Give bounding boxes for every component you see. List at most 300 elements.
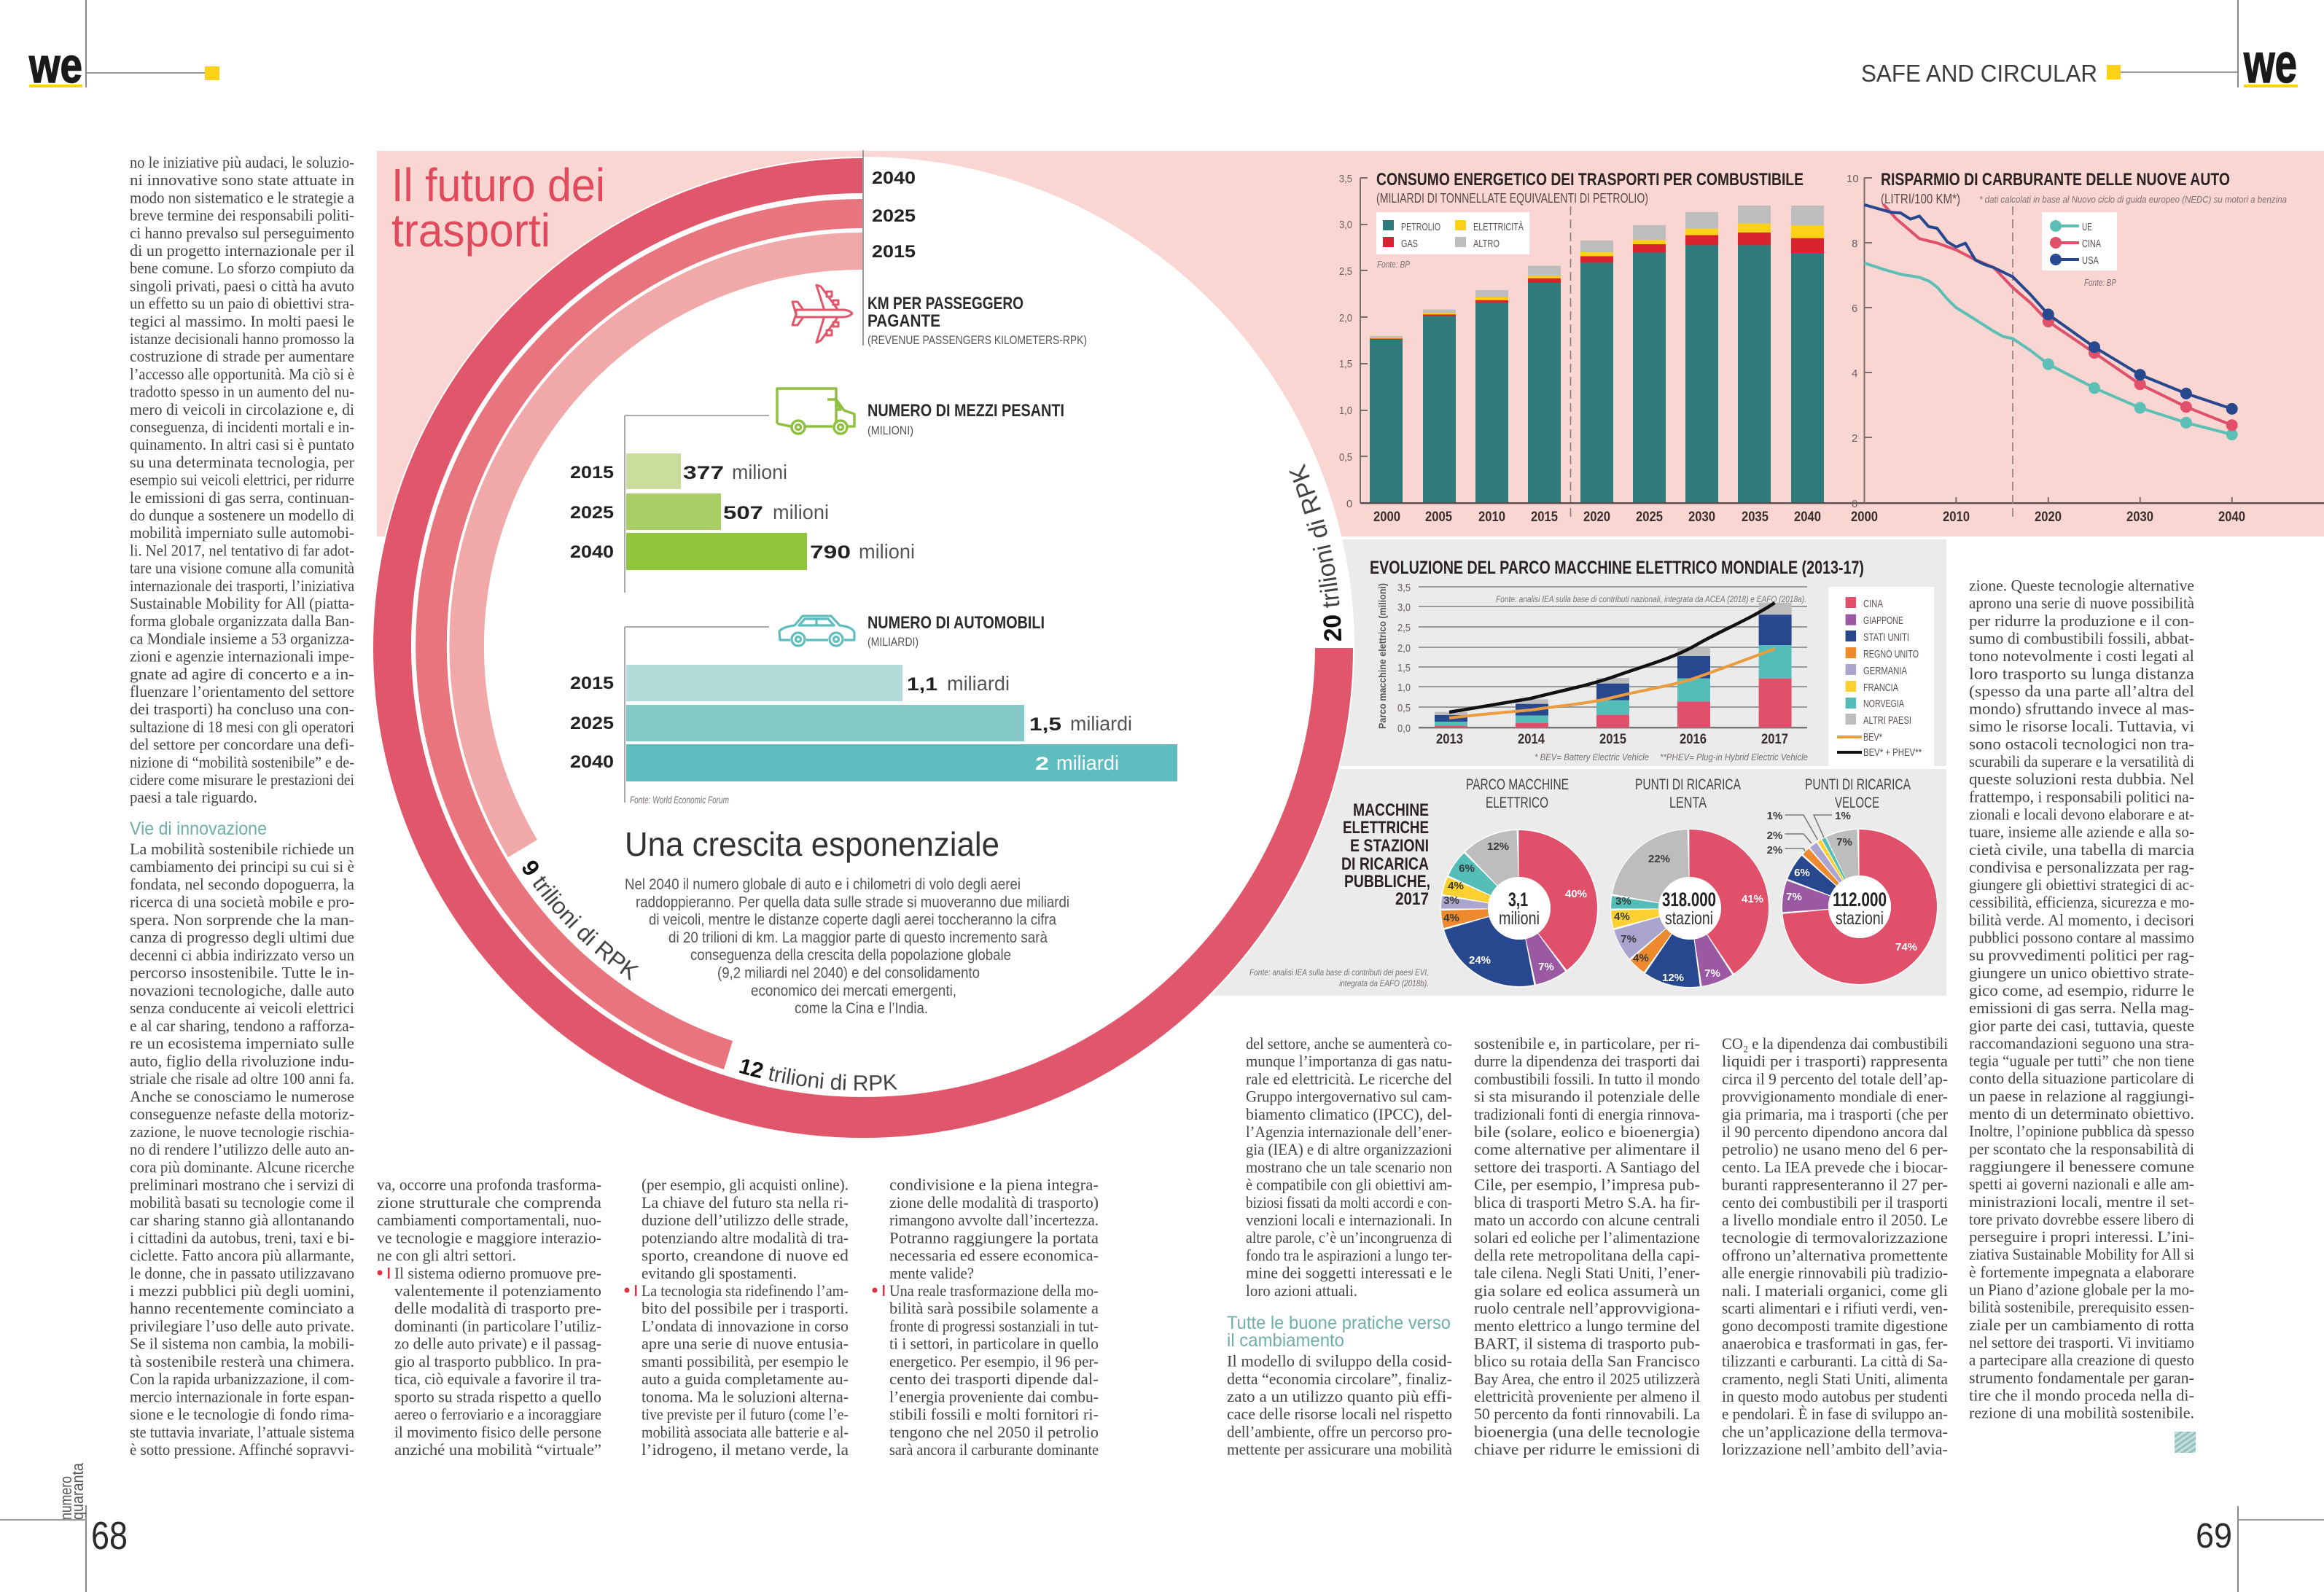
text column 8 — [1969, 576, 2194, 1422]
text column 1: lower: car sharing stanno già allontanando — [130, 1211, 354, 1229]
text column 3: bito del possibile per i trasporti. — [642, 1299, 849, 1317]
x axis years: 2035 — [1742, 510, 1769, 525]
text column 2: zione strutturale che comprenda — [377, 1193, 601, 1211]
text column 3: auto a guida completamente au- — [642, 1370, 849, 1388]
text column 6: ruolo centrale nell’approvvigiona- — [1474, 1299, 1700, 1317]
section title: PUBBLICHE, — [1344, 872, 1430, 891]
text column 2: dominanti (in particolare l’utiliz- — [394, 1316, 601, 1335]
text column 1: lower: cora più dominante. Alcune ricerche — [130, 1158, 354, 1176]
text column 2: valentemente il potenziamento — [394, 1281, 601, 1300]
text column 7: anaerobica e trasformati in gas, fer- — [1722, 1334, 1948, 1352]
donut 1: parco macchine elettrico: 7% — [1538, 961, 1554, 973]
text column 8: tore privato dovrebbe essere libero di — [1969, 1210, 2194, 1228]
text column 1: upper: li. Nel 2017, nel tentativo di far adot- — [130, 541, 354, 559]
heading: vie di innovazione: Vie di innovazione — [130, 819, 267, 839]
block: km per passenger — [792, 285, 1087, 347]
donut 2: punti di ricarica lenta — [1610, 776, 1769, 988]
text column 8: a partecipare alla creazione di questo — [1969, 1351, 2194, 1369]
text column 2: Il sistema odierno promuove pre- — [394, 1264, 601, 1282]
text column 8: ministrazioni locali, mentre il set- — [1969, 1193, 2194, 1211]
text column 8: strumento fondamentale per garan- — [1969, 1368, 2194, 1386]
y axis labels: 1,5 — [1339, 358, 1352, 370]
section title: 2017 — [1395, 889, 1429, 909]
small percentage callouts: 2% — [1767, 844, 1782, 857]
bar 2040 trucks — [570, 533, 915, 570]
donut 3: punti di ricarica veloce: PUNTI DI RICARICA — [1805, 776, 1911, 793]
text column 1: lower: ricerca di una società mobile e pro- — [130, 893, 354, 911]
page number 69: 69 — [2196, 1517, 2232, 1556]
text column 1: lower: cambiamento dei principi su cui si è — [130, 857, 354, 875]
text column 5: upper: del settore, anche se aumenterà co- — [1246, 1034, 1452, 1053]
text column 1: lower: Anche se conosciamo le numerose — [130, 1087, 354, 1105]
text column 1: lower: sione e le tecnologie di fondo rima- — [130, 1405, 354, 1424]
y axis labels: 1,5 — [1397, 662, 1411, 674]
text column 8: sono ostacoli tecnologici non tra- — [1969, 735, 2194, 753]
donut 1: parco macchine elettrico: ELETTRICO — [1486, 795, 1548, 811]
legend countries: REGNO UNITO — [1863, 648, 1919, 660]
y axis labels: 3,0 — [1397, 601, 1411, 614]
bars — [1435, 603, 1792, 727]
line chart: risparmio di carburante: (LITRI/100 KM*) — [1881, 192, 1960, 206]
text column 1: lower: i mezzi pubblici più degli uomini, — [130, 1281, 354, 1300]
paragraph: crescita: conseguenza della crescita della popolazione globale — [690, 947, 1011, 964]
x axis years: 2040 — [1794, 510, 1821, 525]
donut section: macchine elettriche e stazioni di ricarica — [1249, 776, 1938, 988]
text column 5: lower: detta “economia circolare”, finaliz- — [1227, 1370, 1452, 1388]
section title: ELETTRICHE — [1343, 818, 1429, 838]
text column 8: raccomandazioni seguono una stra- — [1969, 1034, 2194, 1052]
donut 3: punti di ricarica veloce: 7% — [1836, 836, 1852, 848]
x axis years: 2020 — [1583, 510, 1610, 525]
x axis years: 2015 — [1599, 732, 1626, 747]
text column 6: come alternative per alimentare il — [1474, 1140, 1700, 1158]
text column 2 — [377, 1176, 601, 1459]
text column 4: Una reale trasformazione della mo- — [889, 1281, 1099, 1300]
small percentage callouts: 2% — [1767, 830, 1782, 842]
y axis labels: 3,5 — [1397, 582, 1411, 594]
text column 8: condivisa e personalizzata per rag- — [1969, 858, 2194, 876]
title — [391, 159, 605, 257]
pink background panel — [377, 151, 2324, 536]
text column 4: necessaria ed essere economica- — [889, 1246, 1099, 1264]
text column 1: upper: cidere come misurare le prestazioni dei — [130, 770, 354, 789]
x axis years: 2030 — [2126, 510, 2153, 525]
text column 7: cramento, negli Stati Uniti, alimenta — [1722, 1370, 1948, 1388]
text column 7: offrono un’alternativa promettente — [1722, 1246, 1948, 1264]
text column 4: rimangono avvolte dall’incertezza. — [889, 1211, 1099, 1229]
text column 6: sostenibile e, in particolare, per ri- — [1474, 1034, 1700, 1053]
text column 5: lower — [1227, 1352, 1452, 1459]
bar 2040 cars — [570, 744, 1177, 781]
bar 2025 cars — [570, 705, 1132, 741]
text column 7: circa il 9 percento del totale dell’ap- — [1722, 1069, 1948, 1088]
text column 8: tono notevolmente i costi legati al — [1969, 647, 2194, 665]
block: heavy vehicles: (MILIONI) — [867, 424, 913, 437]
bar 2015 cars: 1,1 — [907, 674, 937, 695]
text column 8: tuare, insieme alle aziende e alla so- — [1969, 823, 2194, 841]
text column 1: upper: nizione di “mobilità sostenibile” e de- — [130, 753, 354, 771]
y axis labels: 4 — [1852, 367, 1857, 380]
text column 2: tica, ciò equivale a favorire il tra- — [394, 1370, 601, 1388]
text column 1: lower: mercio internazionale in forte espan- — [130, 1387, 354, 1405]
legend fuel: GAS — [1401, 238, 1418, 250]
text column 6: BART, il sistema di trasporto pub- — [1474, 1334, 1700, 1352]
heading: una crescita esponenziale: Una crescita esponenziale — [625, 825, 999, 863]
block: cars — [570, 613, 1177, 805]
text column 1: upper: modo non sistematico e le strategie a — [130, 188, 354, 206]
legend countries: BEV* + PHEV** — [1863, 746, 1922, 759]
text column 3: apre una serie di nuove entusia- — [642, 1335, 849, 1353]
y axis labels: 3,0 — [1339, 219, 1352, 231]
text column 8: giungere gli obiettivi strategici di ac- — [1969, 875, 2194, 894]
text column 6: chiave per ridurre le emissioni di — [1474, 1440, 1700, 1459]
icon: truck — [777, 389, 854, 434]
text column 1: lower: auto, figlio della rivoluzione indu- — [130, 1052, 354, 1070]
issue label: quaranta — [69, 1462, 87, 1520]
label: 20 trillion: 20 trilioni di RPK — [1289, 464, 1341, 641]
text column 8: conto della situazione particolare di — [1969, 1069, 2194, 1088]
donut 1: parco macchine elettrico: milioni — [1499, 908, 1540, 929]
donut 2: punti di ricarica lenta: 318.000 — [1662, 889, 1716, 910]
x axis years: 2040 — [2218, 510, 2245, 525]
bar 2015 trucks — [570, 453, 787, 489]
text column 8: perseguire i propri interessi. L’ini- — [1969, 1228, 2194, 1246]
text column 1: lower: privilegiare l’uso delle auto private. — [130, 1316, 354, 1335]
bar 2040 cars: 2040 — [570, 752, 614, 772]
x axis years — [1851, 510, 2245, 525]
text column 1: lower: zazione, le nuove tecnologie rischia- — [130, 1123, 354, 1141]
text column 1: upper: costruzione di strade per aumentare — [130, 347, 354, 365]
end mark: hatched square — [2175, 1432, 2196, 1453]
legend lines: UE — [2082, 221, 2092, 233]
text column 3: mobilità associata alle batterie e al- — [642, 1423, 849, 1441]
text column 1: upper: l’accesso alle opportunità. Ma ciò si è — [130, 364, 354, 383]
donut 1: parco macchine elettrico: 3,1 — [1508, 889, 1528, 910]
y axis labels: 1,0 — [1339, 405, 1352, 417]
text column 6: settore dei trasporti. A Santiago del — [1474, 1158, 1700, 1176]
text column 5: lower: Il modello di sviluppo della cosid- — [1227, 1352, 1452, 1370]
text column 7: scarti alimentari e i rifiuti verdi, ven- — [1722, 1299, 1948, 1317]
text column 7: gia primaria, ma i trasporti (che per — [1722, 1105, 1949, 1123]
donut 1: parco macchine elettrico: 24% — [1469, 954, 1491, 967]
text column 5: upper: biziosi fissati da molti accordi e con- — [1246, 1193, 1452, 1211]
y axis labels: 0 — [1852, 498, 1857, 510]
text column 5: upper: biamento climatico (IPCC), del- — [1246, 1105, 1452, 1123]
bar 2040 trucks: 2040 — [570, 542, 614, 562]
text column 6: tradizionali fonti di energia rinnova- — [1474, 1105, 1700, 1123]
text column 7: il 90 percento dipendono ancora dal — [1722, 1123, 1948, 1141]
icon: car — [779, 616, 854, 646]
paragraph: crescita: economico dei mercati emergenti, — [751, 983, 956, 999]
text column 7: provvigionamento mondiale di ener- — [1722, 1088, 1948, 1106]
block: km per passenger: PAGANTE — [867, 311, 940, 331]
source bp: Fonte: BP — [2084, 277, 2116, 288]
text column 8: cietà civile, una tabella di marcia — [1969, 840, 2194, 859]
text column 8: tire che il mondo proceda nella di- — [1969, 1386, 2194, 1404]
text column 1: lower: Se il sistema non cambia, la mobili- — [130, 1335, 354, 1353]
text column 5: lower: mettente per assicurare una mobilità — [1227, 1440, 1452, 1459]
text column 1: upper: ni innovative sono state attuate in — [130, 171, 354, 189]
ring 2040 — [373, 158, 1353, 1138]
text column 6: Bay Area, che entro il 2025 utilizzerà — [1474, 1370, 1700, 1388]
bar 2015 cars — [570, 665, 1010, 701]
text column 8: sumo di combustibili fossili, abbat- — [1969, 629, 2194, 647]
y axis labels: 2,5 — [1339, 265, 1352, 278]
x axis years: 2010 — [1478, 510, 1505, 525]
source: Fonte: World Economic Forum — [630, 794, 729, 805]
y axis labels: 2,5 — [1397, 622, 1411, 634]
y axis labels: 0,5 — [1397, 702, 1411, 714]
y axis labels: 10 — [1847, 173, 1859, 185]
text column 6: blico su rotaia della San Francisco — [1474, 1352, 1700, 1370]
ring year labels: 2040 — [872, 168, 916, 188]
x axis years — [1436, 732, 1788, 747]
x axis years: 2030 — [1688, 510, 1715, 525]
page header right — [1861, 0, 2298, 95]
text column 8: gior parte dei casi, tuttavia, queste — [1969, 1016, 2194, 1034]
bar 2025 cars: 2025 — [570, 714, 614, 733]
text column 6: Cile, per esempio, l’impresa pub- — [1474, 1176, 1700, 1194]
text column 1: upper: mero di veicoli in circolazione e, di — [130, 400, 354, 418]
source: Fonte: analisi IEA sulla base di contributi nazionali, integrata da ACEA (2018) e EAFO (2018a). — [1496, 594, 1806, 604]
logo: we left: we — [28, 38, 82, 93]
heading: tutte le buone pratiche: il cambiamento — [1227, 1330, 1344, 1351]
x axis years: 2025 — [1636, 510, 1663, 525]
text column 1: lower: le donne, che in passato utilizzavano — [130, 1264, 354, 1282]
text column 2: delle modalità di trasporto pre- — [394, 1299, 601, 1317]
text column 3: potenziando altre modalità di tra- — [642, 1228, 849, 1246]
x axis years: 2017 — [1761, 732, 1788, 747]
x axis years: 2000 — [1373, 510, 1400, 525]
text column 1: upper: quinamento. In altri casi si è puntato — [130, 435, 354, 453]
bar 2025 trucks: milioni — [773, 501, 829, 523]
text column 4: cento dei trasporti dipende dal- — [889, 1370, 1099, 1388]
small percentage callouts — [1767, 810, 1851, 857]
page header left — [28, 0, 219, 93]
ring year labels: 2025 — [872, 206, 916, 226]
issue label — [57, 1462, 87, 1520]
text column 1: lower: percorso insostenibile. Tutte le in- — [130, 964, 354, 982]
text column 6: solari ed eoliche per l’alimentazione — [1474, 1228, 1700, 1246]
donut 1: parco macchine elettrico: 40% — [1565, 888, 1587, 900]
text column 7: che un’applicazione della termova- — [1722, 1422, 1948, 1440]
text column 7: lorizzazione nell’ambito dell’avia- — [1722, 1440, 1948, 1459]
text column 7: tilizzanti e carburanti. La città di Sa- — [1722, 1352, 1948, 1370]
y axis title: Parco macchine elettrico (milioni) — [1376, 583, 1388, 729]
text column 6: combustibili fossili. In tutto il mondo — [1474, 1069, 1700, 1088]
text column 1: upper: tegici al massimo. In molti paesi le — [130, 312, 354, 330]
donut 2: punti di ricarica lenta: 22% — [1648, 853, 1670, 865]
y axis labels — [1397, 582, 1411, 735]
bar 2040 cars: 2 — [1035, 754, 1049, 774]
text column 1: upper: tradotto spesso in un aumento del nu- — [130, 383, 354, 401]
text column 6: tale cilena. Negli Stati Uniti, l’ener- — [1474, 1264, 1700, 1282]
text column 8: scurabili da superare e la versatilità di — [1969, 752, 2194, 770]
baseline of top charts — [1360, 502, 2324, 504]
donut 2: punti di ricarica lenta: 4% — [1633, 952, 1649, 964]
line BEV — [1449, 649, 1774, 718]
text column 4: energetico. Per esempio, il 96 per- — [889, 1352, 1099, 1370]
donut 2: punti di ricarica lenta: PUNTI DI RICARICA — [1635, 776, 1741, 793]
text column 6: bile (solare, eolico e bioenergia) — [1474, 1123, 1700, 1141]
text column 5: lower: zato a un utilizzo quanto più effi- — [1227, 1387, 1452, 1405]
text column 1: upper: internazionale dei trasporti, l’iniziativa — [130, 577, 354, 595]
text column 1: upper: ci hanno prevalso sul perseguimento — [130, 224, 354, 242]
text column 1: lower: ste tuttavia invariate, l’attuale sistema — [130, 1423, 354, 1441]
text column 2: gio al trasporto pubblico. In pra- — [394, 1352, 601, 1370]
text column 1: upper: zioni e agenzie internazionali impe- — [130, 647, 354, 666]
text column 1: lower: e al car sharing, tendono a rafforza- — [130, 1016, 354, 1034]
text column 3: smanti possibilità, per esempio le — [642, 1352, 849, 1370]
text column 1: upper: do dunque a sostenere un modello di — [130, 506, 354, 524]
text column 3: tive previste per il futuro (come l’e- — [642, 1405, 849, 1424]
text column 1: upper — [130, 153, 355, 806]
text column 4: condivisione e la piena integra- — [889, 1176, 1099, 1194]
text column 8: (spesso da una parte all’altra del — [1969, 682, 2194, 700]
donut 2: punti di ricarica lenta: 4% — [1614, 910, 1630, 923]
bar 2025 trucks — [570, 493, 829, 530]
text column 3: duzione dell’utilizzo delle strade, — [642, 1211, 849, 1229]
text column 1: lower: ciclette. Fatto ancora più allarmante, — [130, 1246, 354, 1264]
text column 3: La tecnologia sta ridefinendo l’am- — [642, 1281, 849, 1300]
legend fuel: PETROLIO — [1401, 221, 1440, 233]
text column 3: evitando gli spostamenti. — [642, 1264, 797, 1282]
text column 3: tonoma. Ma le soluzioni alterna- — [642, 1387, 849, 1405]
icon: plane — [792, 285, 852, 343]
text column 4: bilità sarà possibile solamente a — [889, 1299, 1099, 1317]
bar 2015 cars: 2015 — [570, 674, 614, 693]
text column 1: upper: paesi a tale riguardo. — [130, 788, 257, 806]
text column 1: lower: La mobilità sostenibile richiede un — [130, 840, 354, 858]
text column 7: e pendolari. È in fase di sviluppo an- — [1722, 1405, 1948, 1423]
text column 1: upper: gnate ad agire di concerto e a in- — [130, 665, 354, 683]
text column 8: nel settore dei trasporti. Vi invitiamo — [1969, 1333, 2194, 1351]
y axis labels: 2,0 — [1339, 312, 1352, 324]
block: heavy vehicles — [570, 389, 1064, 593]
text column 6: mento elettrico a lungo termine del — [1474, 1316, 1700, 1335]
legend countries: ALTRI PAESI — [1863, 714, 1911, 727]
ring 2025 — [416, 199, 863, 1069]
text column 1: lower: Con la rapida urbanizzazione, il com- — [130, 1370, 354, 1388]
text column 4 — [872, 1176, 1099, 1459]
text column 1: lower: i cittadini da autobus, treni, taxi e bi- — [130, 1228, 354, 1246]
text column 6: gia solare ed eolica assumerà un — [1474, 1281, 1700, 1300]
small percentage callouts: 1% — [1767, 810, 1782, 822]
source: Fonte: analisi IEA sulla base di contributi dei paesi EVI, — [1249, 967, 1429, 978]
x axis years: 2005 — [1425, 510, 1452, 525]
x axis years: 2013 — [1436, 732, 1463, 747]
donut 3: punti di ricarica veloce: 112.000 — [1833, 889, 1887, 910]
text column 2: va, occorre una profonda trasforma- — [377, 1176, 601, 1194]
text column 8: cessibilità, efficienza, sicurezza e mo- — [1969, 893, 2194, 911]
text column 8: giungere un unico obiettivo strate- — [1969, 964, 2194, 982]
text column 8: spetti ai governi nazionali e alle am- — [1969, 1175, 2194, 1193]
series USA — [1865, 205, 2238, 415]
source bp: Fonte: BP — [1377, 259, 1410, 270]
text column 6: bioenergia (una delle tecnologie — [1474, 1422, 1700, 1440]
heading: automobili: NUMERO DI AUTOMOBILI — [867, 613, 1045, 633]
text column 5: upper: mine dei soggetti interessati e le — [1246, 1264, 1452, 1282]
text column 8: per ridurre la produzione e il con- — [1969, 612, 2194, 630]
y axis labels: 3,5 — [1339, 173, 1352, 185]
text column 1: upper: dei trasporti) ha concluso una con- — [130, 700, 354, 718]
issue label: numero — [57, 1476, 75, 1520]
x axis years: 2010 — [1943, 510, 1970, 525]
footnote — [1535, 752, 1808, 762]
text column 4: l’energia proveniente dai combu- — [889, 1387, 1099, 1405]
donut 1: parco macchine elettrico: 4% — [1443, 912, 1459, 924]
section title: E STAZIONI — [1350, 836, 1429, 856]
paragraph: crescita: raddoppieranno. Per quella data sulle strade si muoveranno due miliardi — [636, 894, 1069, 910]
text column 4: mente valide? — [889, 1264, 974, 1282]
text column 7: nali. I materiali organici, come gli — [1722, 1281, 1948, 1300]
donut 2: punti di ricarica lenta: 7% — [1621, 933, 1637, 945]
text column 8: mento di un determinato obiettivo. — [1969, 1104, 2194, 1123]
line BEV plus PHEV — [1449, 603, 1774, 712]
text column 6: mato un accordo con alcune centrali — [1474, 1211, 1700, 1229]
bar 2040 trucks: milioni — [859, 540, 915, 563]
heading: tutte le buone pratiche: Tutte le buone pratiche verso — [1227, 1313, 1451, 1333]
text column 2: cambiamenti comportamentali, nuo- — [377, 1211, 601, 1229]
small percentage callouts: 1% — [1835, 810, 1851, 822]
paragraph: crescita: di 20 trilioni di km. La maggior parte di questo incremento sarà — [668, 929, 1048, 946]
paragraph: crescita: Nel 2040 il numero globale di auto e i chilometri di volo degli aerei — [625, 876, 1021, 893]
text column 1: lower: mobilità basati su tecnologie come il — [130, 1193, 354, 1211]
text column 1: lower: decenni ci abbia indirizzato verso un — [130, 945, 354, 964]
donut 1: parco macchine elettrico: 12% — [1487, 840, 1509, 853]
text column 1: upper: ca Mondiale insieme a 53 organizza- — [130, 629, 354, 647]
x axis years: 2016 — [1680, 732, 1707, 747]
text column 8: Inoltre, l’opinione pubblica dà spesso — [1969, 1122, 2194, 1140]
legend countries: STATI UNITI — [1863, 631, 1909, 644]
text column 1: upper: forma globale organizzata dalla Ban- — [130, 612, 354, 630]
text column 3: (per esempio, gli acquisti online). — [642, 1176, 849, 1194]
text column 3: l’idrogeno, il metano verde, la — [642, 1440, 849, 1459]
text column 8: loro trasporto su lunga distanza — [1969, 664, 2194, 682]
series UE — [1865, 263, 2238, 440]
section title: DI RICARICA — [1341, 854, 1429, 874]
text column 8: mondo) sfruttando invece al mas- — [1969, 700, 2194, 718]
donut 1: parco macchine elettrico: 6% — [1459, 862, 1475, 875]
donut 2: punti di ricarica lenta: 12% — [1662, 972, 1684, 984]
text column 1: upper: tare una visione comune alla comunità — [130, 559, 354, 577]
text column 8: tegia “uguale per tutti” che non tiene — [1969, 1052, 2194, 1070]
legend countries: FRANCIA — [1863, 682, 1898, 694]
donut 1: parco macchine elettrico — [1440, 776, 1598, 987]
y axis labels: 0,5 — [1339, 451, 1352, 464]
text column 5: upper: munque l’importanza di gas natu- — [1246, 1052, 1452, 1070]
text column 1: lower: novazioni tecnologiche, dalle auto — [130, 981, 354, 999]
bar 2015 cars: miliardi — [947, 672, 1010, 695]
text column 8: un paese in relazione al raggiungi- — [1969, 1087, 2194, 1105]
y axis labels: 6 — [1852, 303, 1857, 315]
text column 1: lower — [130, 840, 354, 1459]
text column 7: petrolio) ne usano meno del 6 per- — [1722, 1140, 1948, 1158]
y axis labels: 1,0 — [1397, 682, 1411, 694]
text column 1: upper: conseguenza, di incidenti mortali e in- — [130, 418, 354, 436]
legend countries: GERMANIA — [1863, 665, 1907, 677]
donut 2: punti di ricarica lenta: 7% — [1704, 967, 1720, 980]
y axis labels: 2 — [1852, 432, 1857, 445]
text column 1: lower: hanno recentemente cominciato a — [130, 1299, 354, 1317]
text column 8: rezione di una mobilità sostenibile. — [1969, 1404, 2194, 1422]
ring year labels: 2015 — [872, 242, 916, 262]
text column 1: lower: tà sostenibile resterà una chimera. — [130, 1352, 354, 1370]
donut 3: punti di ricarica veloce: 7% — [1786, 891, 1802, 903]
text column 1: upper: di un progetto internazionale per il — [130, 241, 354, 260]
chart title: EVOLUZIONE DEL PARCO MACCHINE ELETTRICO MONDIALE (2013-17) — [1370, 558, 1864, 578]
text column 1: lower: re un ecosistema imperniato sulle — [130, 1034, 354, 1053]
